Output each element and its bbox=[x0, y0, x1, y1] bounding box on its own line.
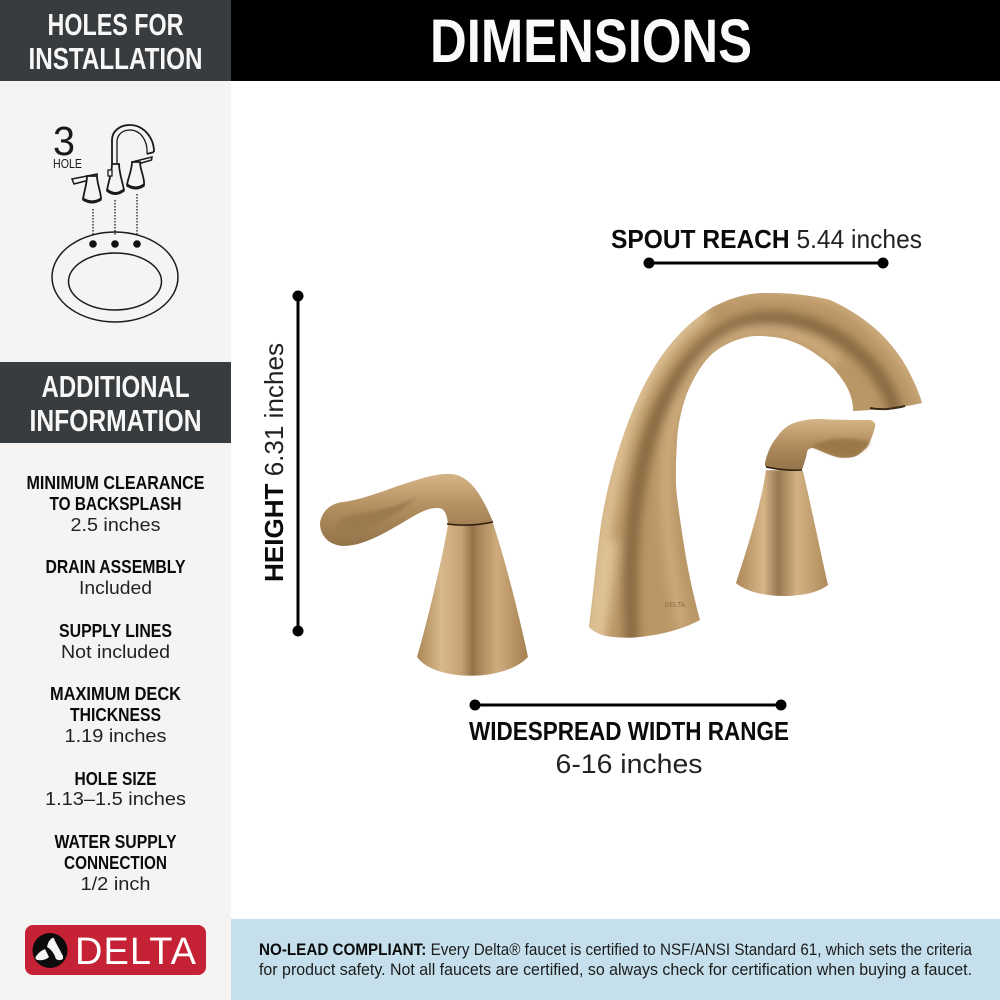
header: holes for installation: INSTALLATION bbox=[28, 41, 202, 76]
info: maximum deck thickness: 1.19 inches bbox=[64, 725, 166, 746]
info: hole size: 1.13–1.5 inches bbox=[45, 788, 186, 809]
title: dimensions: DIMENSIONS bbox=[430, 7, 752, 75]
dimension: spout reach bbox=[611, 224, 922, 268]
header: additional information bbox=[0, 362, 231, 443]
info: hole size bbox=[45, 769, 186, 809]
info: supply lines: SUPPLY LINES bbox=[59, 621, 172, 641]
logo: delta: DELTA bbox=[75, 931, 197, 973]
header: additional information: INFORMATION bbox=[30, 403, 202, 438]
info: supply lines: Not included bbox=[61, 641, 170, 662]
info: maximum deck thickness: MAXIMUM DECK bbox=[50, 684, 181, 704]
info: maximum deck thickness: THICKNESS bbox=[70, 705, 161, 725]
header: holes for installation bbox=[0, 0, 231, 81]
info: drain assembly: DRAIN ASSEMBLY bbox=[46, 557, 186, 577]
dimension: widespread width range bbox=[469, 700, 789, 779]
dimension: widespread width range: WIDESPREAD WIDTH RANGE bbox=[469, 716, 789, 746]
dimension: height bbox=[259, 290, 304, 636]
info: minimum clearance: 2.5 inches bbox=[70, 514, 160, 535]
info: drain assembly bbox=[46, 557, 186, 598]
info: hole size: HOLE SIZE bbox=[74, 769, 156, 789]
icon: three hole sink diagram: HOLE bbox=[53, 157, 82, 171]
dimension: widespread width range: 6-16 inches bbox=[556, 749, 702, 779]
icon: three hole sink diagram: 3 bbox=[53, 118, 75, 164]
info: water supply connection: CONNECTION bbox=[64, 853, 167, 873]
header: holes for installation: HOLES FOR bbox=[48, 7, 184, 42]
no-lead compliance banner bbox=[231, 919, 1000, 1000]
logo: delta bbox=[25, 925, 206, 975]
no-lead compliance banner: for product safety. Not all faucets are certified, so always check for certification when buying a faucet. bbox=[259, 960, 972, 979]
info: minimum clearance: MINIMUM CLEARANCE bbox=[26, 473, 204, 493]
info: water supply connection bbox=[54, 832, 176, 894]
faucet: spout bbox=[589, 289, 925, 645]
info: supply lines bbox=[59, 621, 172, 662]
header: additional information: ADDITIONAL bbox=[42, 369, 190, 404]
sidebar panel background bbox=[0, 81, 231, 1000]
faucet: spout: DELTA bbox=[665, 602, 685, 609]
faucet: right handle bbox=[736, 419, 875, 596]
info: minimum clearance: TO BACKSPLASH bbox=[50, 494, 182, 514]
info: maximum deck thickness bbox=[50, 684, 181, 746]
title: dimensions bbox=[231, 0, 1000, 81]
info: water supply connection: 1/2 inch bbox=[80, 873, 150, 894]
dimension: spout reach: SPOUT REACH 5.44 inches bbox=[611, 224, 922, 254]
info: drain assembly: Included bbox=[79, 577, 152, 598]
info: minimum clearance bbox=[26, 473, 204, 535]
dimension: height: HEIGHT 6.31 inches bbox=[259, 343, 289, 582]
faucet: left handle bbox=[320, 474, 528, 676]
icon: three hole sink diagram bbox=[52, 118, 178, 322]
info: water supply connection: WATER SUPPLY bbox=[54, 832, 176, 852]
